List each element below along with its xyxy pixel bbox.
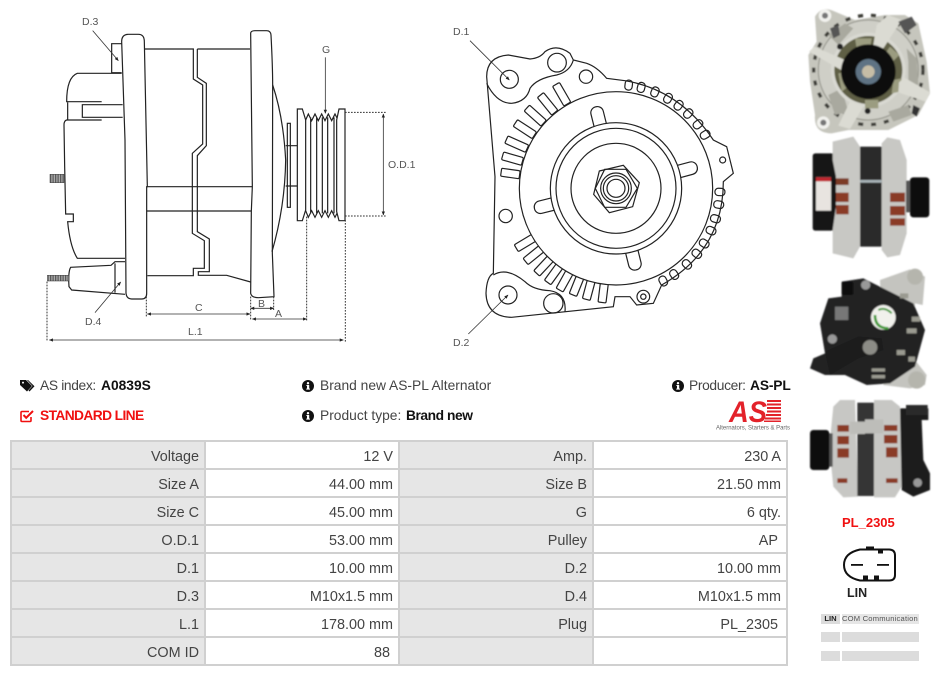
specification table: Size C xyxy=(157,504,199,520)
D.4 terminal and bolt xyxy=(47,262,125,294)
specification table: 88 xyxy=(374,644,390,660)
specification table: 230 A xyxy=(744,448,781,464)
AS index: A0839S xyxy=(101,378,151,393)
dimension labels: B xyxy=(258,298,265,310)
pin legend table xyxy=(821,614,919,661)
dimension labels: D.4 xyxy=(85,316,102,328)
specification table: D.2 xyxy=(565,560,587,576)
mounting plate outline xyxy=(486,48,733,317)
icon: info xyxy=(672,380,684,392)
specification table: 12 V xyxy=(363,448,393,464)
connector label: LIN xyxy=(847,586,867,600)
legend row: LIN xyxy=(821,614,919,624)
dimension labels: D.3 xyxy=(82,16,98,28)
legend row: LIN: COM Communication xyxy=(842,614,918,623)
pulley rings and nut xyxy=(550,123,682,254)
product photo: side, rear connector xyxy=(808,399,932,498)
AS index: AS index: xyxy=(40,378,96,393)
cooling fins xyxy=(501,80,725,303)
product photo: side xyxy=(812,136,930,259)
icon: info xyxy=(302,380,314,392)
specification table: 10.00 mm xyxy=(717,560,781,576)
stator housing outline xyxy=(144,49,252,282)
main housing circle xyxy=(519,92,713,285)
standard line badge: STANDARD LINE xyxy=(40,408,144,423)
front view technical drawing xyxy=(453,26,734,349)
specification table: Size B xyxy=(545,476,587,492)
specification table: 6 qty. xyxy=(747,504,781,520)
AS logo xyxy=(716,396,790,432)
pulley xyxy=(297,109,345,221)
dimension labels: C xyxy=(195,302,203,314)
specification table xyxy=(10,440,788,666)
connector diagram xyxy=(843,546,896,582)
producer xyxy=(672,378,791,393)
legend row: empty xyxy=(821,651,919,661)
specification table: Plug xyxy=(558,616,587,632)
dimension labels: A xyxy=(275,308,282,320)
specification table: 178.00 mm xyxy=(321,616,393,632)
specification table: D.4 xyxy=(565,588,587,604)
specification table: COM ID xyxy=(147,644,199,660)
D.1 label: D.1 xyxy=(453,26,470,38)
mounting holes xyxy=(499,53,726,313)
brand note: Brand new AS-PL Alternator xyxy=(320,378,491,393)
plug code: PL_2305 xyxy=(842,515,895,530)
AS index xyxy=(20,378,151,393)
specification table: Voltage xyxy=(151,448,199,464)
specification table: G xyxy=(576,504,587,520)
D.2 label: D.2 xyxy=(453,337,470,349)
specification table: 10.00 mm xyxy=(329,560,393,576)
product type: Product type: xyxy=(320,408,401,423)
specification table: 21.50 mm xyxy=(717,476,781,492)
spokes xyxy=(533,105,699,271)
specification table: Pulley xyxy=(548,532,587,548)
legend row: LIN: LIN xyxy=(824,614,837,623)
icon: info xyxy=(302,410,314,422)
front flange xyxy=(251,31,274,298)
AS logo: Alternators, Starters & Parts xyxy=(716,424,790,432)
specification table: D.3 xyxy=(177,588,199,604)
D.3 bracket xyxy=(112,44,122,73)
legend row: empty xyxy=(821,632,919,642)
specification table: 45.00 mm xyxy=(329,504,393,520)
product photo: front xyxy=(808,8,930,134)
icon: checked box xyxy=(20,410,34,422)
producer: AS-PL xyxy=(750,378,791,393)
product type: Brand new xyxy=(406,408,472,423)
front dome and fan plate xyxy=(272,85,297,252)
product photo: rear xyxy=(809,268,928,390)
dimension labels: L.1 xyxy=(188,326,203,338)
product type xyxy=(302,408,473,423)
AS logo: AS xyxy=(728,396,767,429)
specification table: AP xyxy=(759,532,778,548)
rear cover xyxy=(50,73,125,258)
specification table: 44.00 mm xyxy=(329,476,393,492)
specification table: Amp. xyxy=(553,448,587,464)
dimension labels: O.D.1 xyxy=(388,159,416,171)
specification table: M10x1.5 mm xyxy=(698,588,781,604)
specification table: Size A xyxy=(158,476,199,492)
producer: Producer: xyxy=(689,378,746,393)
specification table: O.D.1 xyxy=(161,532,199,548)
rear flange xyxy=(122,34,147,299)
dimension labels xyxy=(82,16,416,338)
dimension labels: G xyxy=(322,44,330,56)
side view technical drawing xyxy=(46,16,416,342)
specification table: 53.00 mm xyxy=(329,532,393,548)
specification table: M10x1.5 mm xyxy=(310,588,393,604)
specification table: PL_2305 xyxy=(720,616,778,632)
specification table: L.1 xyxy=(179,616,199,632)
specification table: D.1 xyxy=(177,560,199,576)
dimension lines xyxy=(47,31,387,342)
D.1 and D.2 arrows xyxy=(468,41,509,334)
icon: tags xyxy=(20,380,34,392)
